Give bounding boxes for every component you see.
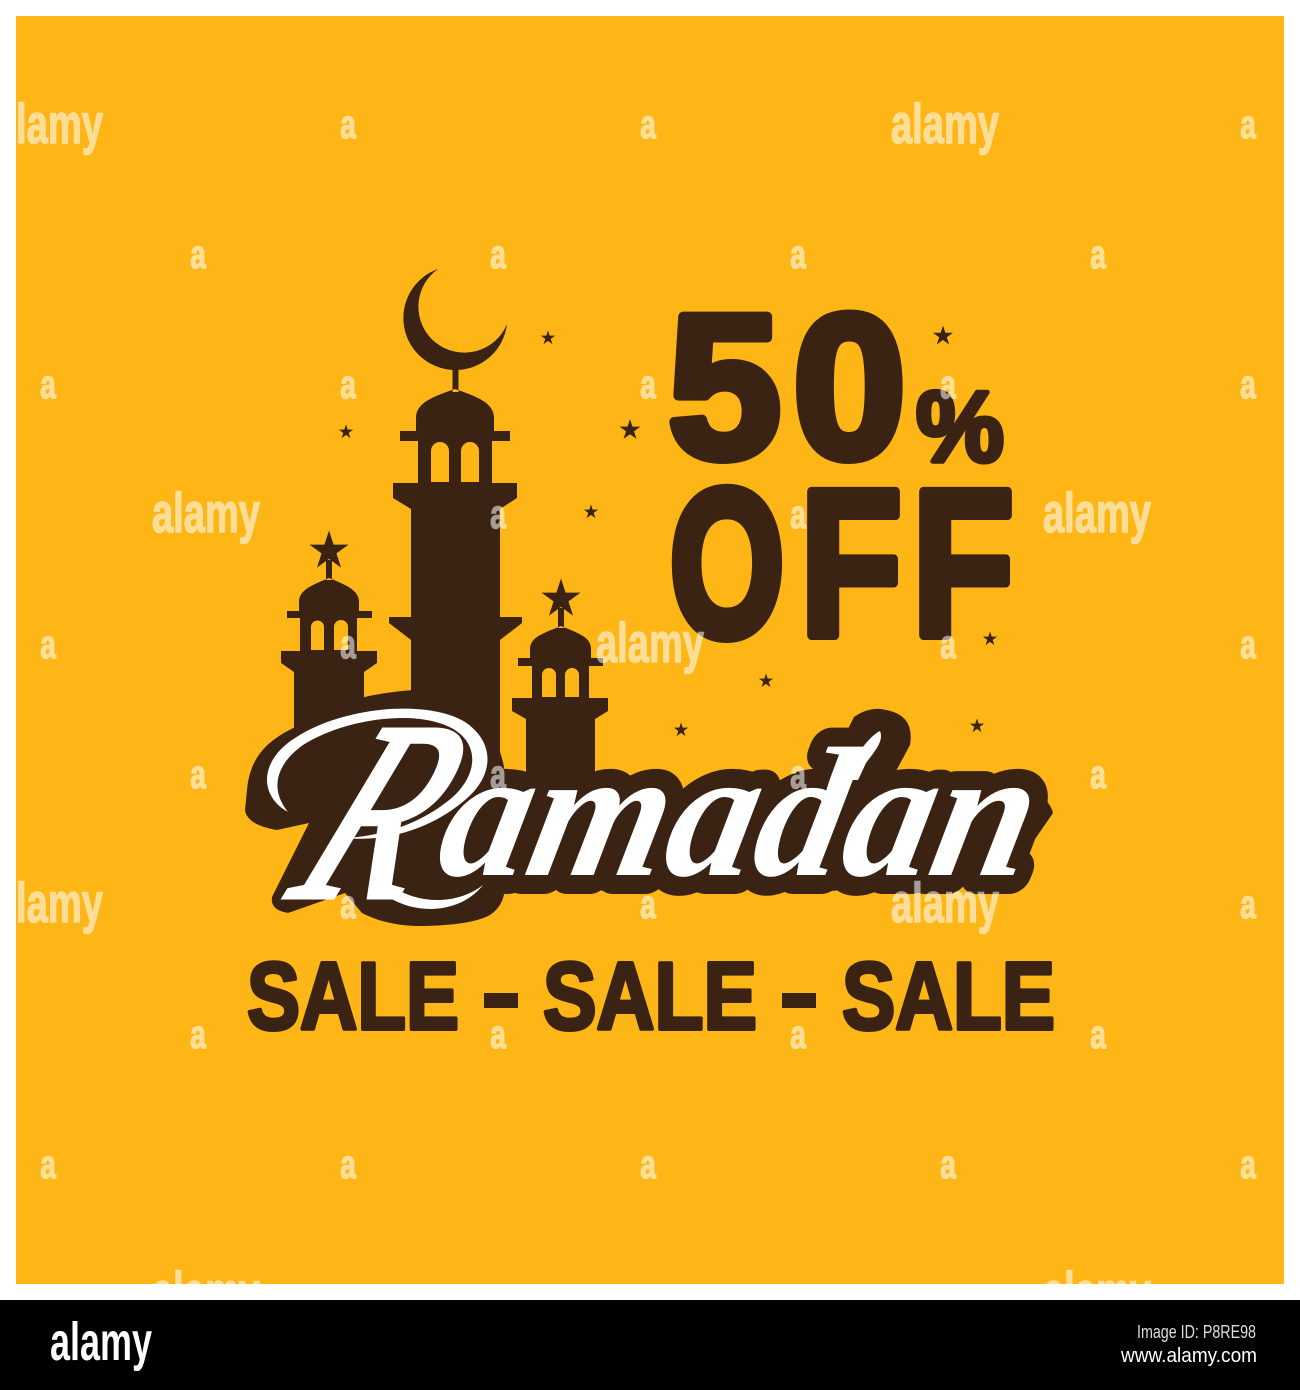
watermarks: small a marks: a — [640, 883, 656, 927]
watermarks: small a marks: a — [640, 103, 656, 147]
watermarks: small a marks: a — [340, 883, 356, 927]
subheading: SALE - SALE - SALE — [247, 943, 1055, 1050]
first SALE: SALE — [247, 943, 459, 1050]
watermarks: small a marks: a — [640, 363, 656, 407]
third SALE: SALE — [842, 943, 1055, 1050]
watermarks: small a marks: a — [190, 1013, 206, 1057]
watermarks: alamy wordmarks: alamy — [152, 1260, 260, 1323]
watermarks: alamy wordmarks — [16, 92, 1151, 1323]
watermarks: small a marks: a — [340, 363, 356, 407]
central minaret — [389, 355, 522, 770]
second SALE: SALE — [543, 943, 757, 1050]
watermarks: small a marks: a — [1240, 363, 1256, 407]
first letter F: F — [800, 448, 902, 680]
icon: star on right minaret — [542, 578, 580, 616]
watermarks: small a marks: a — [190, 753, 206, 797]
watermarks: small a marks: a — [940, 623, 956, 667]
bottom white margin — [0, 1284, 1300, 1300]
watermarks: alamy wordmarks: alamy — [1043, 1260, 1151, 1323]
watermarks: small a marks: a — [940, 1143, 956, 1187]
capital R: R — [257, 671, 507, 953]
digit 0: 0 — [793, 273, 906, 501]
d ascender swash — [842, 731, 881, 780]
watermarks: alamy wordmarks: alamy — [1043, 481, 1151, 544]
watermarks: alamy wordmarks: alamy — [152, 481, 260, 544]
second letter F: F — [912, 448, 1014, 680]
image id: Image ID: P8RE98 — [1137, 1322, 1256, 1342]
watermarks: small a marks: a — [1240, 103, 1256, 147]
ribbon: Ramadan brown sticker outline: amadan — [424, 711, 1058, 916]
watermarks: small a marks: a — [490, 1013, 506, 1057]
watermarks: small a marks: a — [790, 753, 806, 797]
website: www.alamy.com — [1120, 1345, 1257, 1367]
watermarks: small a marks: a — [1240, 623, 1256, 667]
watermarks: small a marks: a — [190, 233, 206, 277]
watermarks: small a marks: a — [340, 623, 356, 667]
mosque dome hump — [360, 690, 415, 760]
icon: star on left minaret — [310, 530, 348, 568]
script title: Ramadan — [257, 671, 1058, 953]
watermarks: alamy wordmarks: alamy — [891, 871, 999, 934]
first dash — [484, 993, 518, 1008]
heading: 50% OFF — [668, 273, 1014, 680]
watermarks: small a marks: a — [490, 753, 506, 797]
watermarks: alamy wordmarks: lamy — [16, 92, 103, 155]
watermarks: small a marks: a — [1240, 1143, 1256, 1187]
footer logo: alamy: alamy — [50, 1312, 152, 1372]
watermarks: small a marks: a — [940, 363, 956, 407]
watermarks: small a marks: a — [1090, 233, 1106, 277]
watermarks: small a marks: a — [640, 1143, 656, 1187]
second dash — [782, 993, 816, 1008]
watermarks: alamy wordmarks: alamy — [596, 611, 704, 674]
digit 5: 5 — [668, 273, 781, 501]
watermarks: small a marks: a — [490, 493, 506, 537]
watermarks: small a marks: a — [40, 623, 56, 667]
watermarks: small a marks: a — [40, 363, 56, 407]
watermarks: small a marks: a — [490, 233, 506, 277]
watermarks: small a marks: a — [40, 1143, 56, 1187]
watermarks: small a marks: a — [340, 1143, 356, 1187]
left minaret — [281, 560, 377, 760]
capital R swash — [267, 709, 488, 839]
scattered stars — [339, 326, 997, 736]
icon: crescent moon — [403, 269, 507, 370]
watermarks: small a marks: a — [1090, 1013, 1106, 1057]
watermarks: small a marks: a — [790, 1013, 806, 1057]
watermarks: small a marks: a — [340, 103, 356, 147]
watermarks: small a marks: a — [1240, 883, 1256, 927]
illustration: mosque minarets with crescent — [281, 269, 608, 800]
watermarks: small a marks: a — [1090, 753, 1106, 797]
watermarks: small a marks — [40, 103, 1256, 1187]
letters amadan: amadan — [424, 711, 1058, 916]
R tail swash — [390, 885, 483, 909]
footer bar — [0, 1300, 1300, 1390]
watermarks: alamy wordmarks: alamy — [891, 92, 999, 155]
watermarks: small a marks: a — [790, 493, 806, 537]
watermarks: alamy wordmarks: lamy — [16, 871, 103, 934]
watermarks: small a marks: a — [790, 233, 806, 277]
letter O: O — [670, 448, 784, 680]
percent sign: % — [916, 371, 1004, 483]
right minaret — [512, 608, 608, 800]
